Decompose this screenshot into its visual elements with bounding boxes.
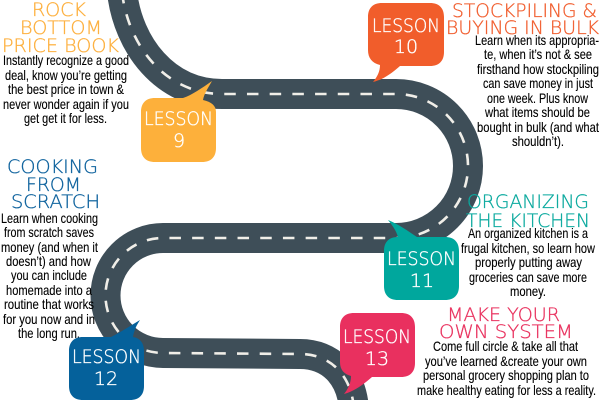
body: rock bottom price book: get get it for less. [24,110,107,126]
lesson 12 bubble: LESSON [72,346,141,368]
body: cooking from scratch: money (and when it [1,239,98,255]
heading: organizing the kitchen: ORGANIZING [467,191,589,213]
panel: lesson 12 text [1,156,100,341]
body: cooking from scratch: for you now and in [3,311,95,327]
lesson 12 bubble [69,320,144,400]
panel: lesson 10 text [446,0,600,149]
panel: lesson 13 text [417,304,596,398]
panel: lesson 9 text [2,0,129,126]
road [105,0,468,400]
heading: cooking from scratch: FROM [26,174,81,196]
lesson 11 bubble: 11 [410,270,434,292]
lesson 13 bubble [340,313,415,394]
lesson 10 bubble [368,3,444,82]
heading: stockpiling and buying in bulk [446,0,600,39]
body: rock bottom price book: deal, know you’re getting [5,67,127,83]
body: make your own system [417,338,596,398]
body: organizing the kitchen [461,225,596,299]
body: cooking from scratch: routine that works [4,296,94,312]
heading: make your own system: MAKE YOUR [447,304,560,326]
lesson 11 bubble: LESSON [387,248,456,270]
heading: cooking from scratch [7,156,100,213]
body: stockpiling [475,32,599,149]
lesson 9 bubble [141,81,216,162]
heading: rock bottom price book: BOTTOM [20,17,102,39]
body: cooking from scratch: doesn’t) and how [6,253,92,269]
lesson 11 bubble [384,220,459,300]
body: cooking from scratch [1,210,98,341]
body: cooking from scratch: from scratch saves [4,224,94,240]
body: cooking from scratch: the long run. [18,325,80,341]
heading: rock bottom price book: PRICE BOOK [2,35,120,57]
heading: organizing the kitchen: THE KITCHEN [466,210,590,232]
heading: make your own system: OWN SYSTEM [439,321,573,343]
body: rock bottom price book: never wonder again if you [3,96,129,112]
body: rock bottom price book: the best price in town & [8,81,125,97]
body: stockpiling: shouldn’t). [512,133,564,149]
body: rock bottom price book: Instantly recognize a good [3,52,129,68]
lesson 10 bubble: LESSON [372,15,440,37]
heading: stockpiling and buying in bulk: STOCKPILING & [452,0,597,22]
lesson 12 bubble: 12 [94,368,118,390]
body: cooking from scratch: you can include [11,267,87,283]
heading: stockpiling and buying in bulk: BUYING IN BULK [446,17,600,39]
heading: rock bottom price book [2,0,120,57]
lesson 10 bubble: 10 [394,36,418,58]
heading: make your own system [439,304,573,343]
heading: cooking from scratch: COOKING [7,156,98,178]
heading: cooking from scratch: SCRATCH [11,191,100,213]
body: cooking from scratch: homemade into a [6,282,92,298]
lesson 13 bubble: 13 [365,348,389,370]
lesson 9 bubble: LESSON [144,108,213,130]
body: organizing the kitchen: money. [510,283,546,299]
lesson 13 bubble: LESSON [343,326,411,348]
panel: lesson 11 text [461,191,596,299]
lesson 9 bubble: 9 [173,130,185,152]
body: cooking from scratch: Learn when cooking [1,210,98,226]
body: rock bottom price book [3,52,129,126]
heading: organizing the kitchen [466,191,590,232]
